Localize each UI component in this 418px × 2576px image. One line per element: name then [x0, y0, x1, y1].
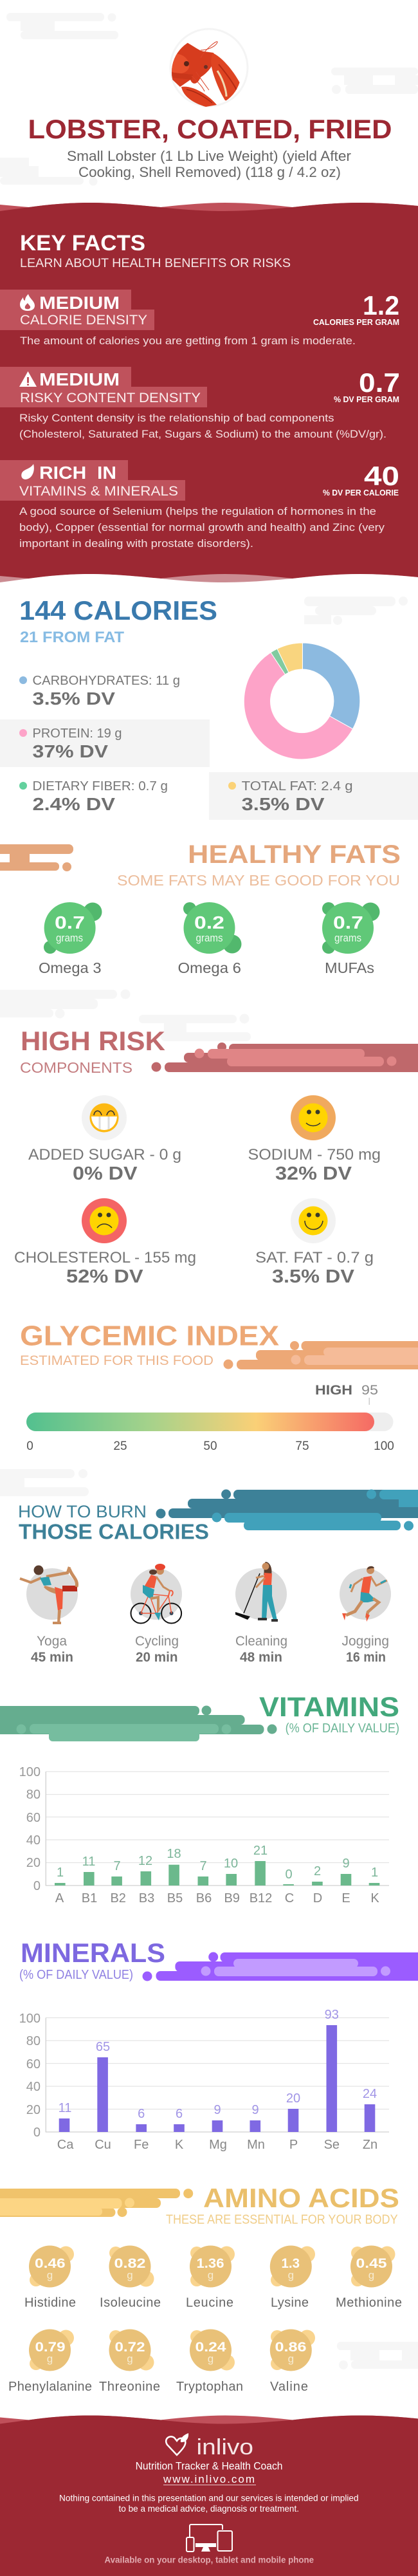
healthy fats heading: HEALTHY FATS: [188, 840, 401, 869]
legend: dietary fiber: 2.4% DV: [32, 794, 115, 814]
bar chart: minerals: 100: [19, 2012, 41, 2026]
logo: [166, 2433, 253, 2460]
fat: omega 6: [177, 902, 242, 976]
bar chart: minerals: 40: [26, 2080, 41, 2094]
vitamins and minerals block: A good source of Selenium (helps the regulation of hormones in the: [19, 506, 376, 517]
vitamins and minerals block: 40: [364, 461, 399, 491]
title: LOBSTER, COATED, FRIED: [28, 114, 392, 144]
bar chart: minerals: 9: [214, 2103, 221, 2117]
activity labels: Cycling: [135, 1634, 179, 1649]
panel: healthy fats: [0, 840, 401, 976]
legend: carbohydrates: 3.5% DV: [32, 689, 115, 709]
glycemic value: 95: [361, 1383, 378, 1398]
logo: inlivo: [197, 2435, 253, 2460]
amino: threonine: [99, 2330, 160, 2394]
calorie density block: The amount of calories you are getting from 1 gram is moderate.: [20, 335, 356, 347]
bar chart: minerals: P: [289, 2138, 298, 2152]
high risk subheading: COMPONENTS: [20, 1059, 132, 1076]
bar chart: vitamins: 18: [167, 1847, 181, 1861]
risky content density block: Risky Content density is the relationship of bad components: [19, 412, 334, 424]
amino: isoleucine: g: [127, 2269, 133, 2281]
ribbon decoration: [0, 844, 73, 871]
healthy fats subheading: SOME FATS MAY BE GOOD FOR YOU: [117, 872, 400, 889]
icon: flame: [20, 294, 35, 311]
amino: histidine: 0.46: [35, 2256, 66, 2271]
amino: threonine: g: [127, 2353, 133, 2365]
legend: total fat: [209, 772, 418, 820]
activity labels: [31, 1634, 389, 1665]
bar chart: minerals: 20: [286, 2091, 300, 2106]
bar chart: vitamins: B5: [167, 1891, 183, 1905]
glycemic value: [315, 1383, 378, 1405]
calorie density block: MEDIUM: [39, 293, 120, 313]
fat: omega 6: Omega 6: [177, 959, 241, 976]
bar chart: minerals: Fe: [134, 2138, 149, 2152]
amino: methionine: [336, 2246, 402, 2310]
glycemic heading: GLYCEMIC INDEX: [20, 1320, 279, 1351]
bar chart: minerals: [19, 2008, 389, 2152]
ribbon decoration: [152, 1042, 418, 1072]
risk: cholesterol: 52% DV: [66, 1266, 143, 1287]
risk: cholesterol: CHOLESTEROL - 155 mg: [14, 1249, 196, 1266]
panel: high risk: [0, 990, 418, 1287]
gauge scale labels: [26, 1440, 394, 1453]
disclaimer: to be a medical advice, diagnosis or treatment.: [118, 2503, 299, 2514]
vitamins and minerals block: body), Copper (essential for normal growth and health) and Zinc (very: [19, 522, 385, 533]
background cloud: [337, 2342, 418, 2369]
fat: omega 3: Omega 3: [39, 959, 102, 976]
bar chart: vitamins: 10: [224, 1857, 238, 1871]
footer: [0, 2416, 418, 2576]
activity labels: 20 min: [136, 1650, 177, 1665]
bar chart: minerals: 80: [26, 2034, 41, 2048]
fat: omega 3: grams: [56, 932, 83, 944]
vitamins and minerals block: % DV PER CALORIE: [323, 488, 399, 497]
bar chart: vitamins: B3: [139, 1891, 154, 1905]
vitamins heading: VITAMINS: [259, 1692, 399, 1723]
bar chart: vitamins: 7: [113, 1859, 121, 1873]
subtitle: [67, 148, 351, 180]
bar chart: minerals: Ca: [57, 2138, 74, 2152]
amino: methionine: g: [368, 2269, 374, 2281]
activity labels: 48 min: [240, 1650, 282, 1665]
bar chart: vitamins: B9: [224, 1891, 240, 1905]
amino: tryptophan: [176, 2330, 243, 2394]
panel: amino acids: [0, 2183, 418, 2394]
amino: histidine: Histidine: [24, 2296, 76, 2310]
bar chart: vitamins: 9: [342, 1857, 350, 1871]
bar chart: minerals: 93: [325, 2008, 339, 2022]
icon: devices: [186, 2525, 232, 2552]
fat: omega 3: [39, 902, 102, 976]
fat: mufas: 0.7: [333, 913, 363, 932]
bar chart: minerals: 6: [138, 2107, 145, 2121]
activity labels: Cleaning: [235, 1634, 287, 1649]
risky content density block: 0.7: [359, 367, 400, 398]
bar chart: vitamins: 0: [285, 1867, 293, 1882]
high risk heading: HIGH RISK: [21, 1026, 165, 1056]
fat: omega 6: 0.2: [194, 913, 224, 932]
bar chart: vitamins: A: [55, 1891, 64, 1905]
icon: leaf: [21, 464, 34, 479]
activity labels: Jogging: [342, 1634, 389, 1649]
risk: added sugar: 0% DV: [73, 1163, 138, 1184]
legend: dietary fiber: [19, 779, 168, 814]
bar chart: vitamins: 40: [26, 1833, 41, 1848]
legend: carbohydrates: CARBOHYDRATES: 11 g: [32, 674, 180, 688]
header background clouds: [0, 13, 418, 185]
amino: phenylalanine: 0.79: [35, 2340, 66, 2355]
amino: isoleucine: Isoleucine: [100, 2296, 161, 2310]
bar chart: vitamins: B1: [82, 1891, 97, 1905]
panel: vitamins: [0, 1692, 399, 1905]
amino: tryptophan: Tryptophan: [176, 2380, 243, 2394]
ribbon decoration: [224, 1341, 418, 1369]
activity: cleaning: [235, 1562, 287, 1622]
risk: saturated fat: 3.5% DV: [272, 1266, 355, 1287]
glycemic subheading: ESTIMATED FOR THIS FOOD: [20, 1353, 214, 1368]
amino: leucine: Leucine: [186, 2296, 233, 2310]
legend: protein: 37% DV: [32, 741, 108, 761]
amino acids heading: AMINO ACIDS: [203, 2183, 399, 2213]
amino: isoleucine: [100, 2246, 161, 2310]
amino: threonine: 0.72: [114, 2340, 145, 2355]
panel: glycemic index: [20, 1320, 418, 1453]
amino: leucine: [186, 2246, 235, 2310]
glycemic gauge: [26, 1413, 394, 1431]
risk: cholesterol: [14, 1198, 196, 1287]
activity labels: Yoga: [37, 1634, 67, 1649]
vitamins and minerals block: [0, 460, 399, 550]
calorie density block: 1.2: [363, 290, 399, 320]
risk: sodium: 32% DV: [275, 1163, 352, 1184]
gauge scale labels: 0: [26, 1440, 33, 1453]
fat: omega 3: 0.7: [55, 913, 85, 932]
legend: total fat: TOTAL FAT: 2.4 g: [242, 779, 353, 793]
fat: mufas: [322, 902, 379, 976]
fat: mufas: MUFAs: [325, 959, 374, 976]
bar chart: vitamins: 1: [371, 1866, 378, 1880]
bar chart: vitamins: E: [341, 1891, 350, 1905]
vitamins and minerals block: important in dealing with prostate disorders).: [19, 538, 253, 550]
risky content density block: (Cholesterol, Saturated Fat, Sugars & Sodium) to the amount (%DV/gr).: [19, 429, 386, 440]
risk: added sugar: [28, 1095, 181, 1184]
bar chart: vitamins: 1: [57, 1866, 64, 1880]
activity: yoga: [20, 1565, 78, 1624]
amino acids subheading: THESE ARE ESSENTIAL FOR YOUR BODY: [166, 2212, 398, 2227]
amino: lysine: 1.3: [282, 2256, 300, 2271]
bar chart: vitamins: 80: [26, 1788, 41, 1802]
panel: key facts: [0, 203, 418, 593]
bar chart: minerals: Mg: [209, 2138, 227, 2152]
icon: warning: [19, 371, 37, 387]
panel: minerals: [19, 1938, 418, 2152]
bar chart: vitamins: 0: [33, 1879, 41, 1893]
bar chart: vitamins: C: [285, 1891, 294, 1905]
donut chart: [244, 643, 360, 759]
risky content density block: [0, 367, 400, 440]
bar chart: vitamins: 21: [253, 1844, 268, 1858]
amino: methionine: 0.45: [356, 2256, 387, 2271]
burn heading: HOW TO BURN: [18, 1502, 147, 1521]
risk: saturated fat: [255, 1198, 374, 1287]
amino: leucine: 1.36: [197, 2256, 224, 2271]
bar chart: vitamins: 11: [82, 1855, 95, 1869]
bar chart: minerals: K: [175, 2138, 184, 2152]
bar chart: vitamins: 7: [199, 1859, 207, 1873]
bar chart: vitamins: 100: [19, 1765, 41, 1779]
amino: isoleucine: 0.82: [114, 2256, 145, 2271]
legend: protein: [0, 719, 210, 767]
bar chart: vitamins: K: [370, 1891, 379, 1905]
bar chart: minerals: 6: [176, 2107, 183, 2121]
amino: methionine: Methionine: [336, 2296, 402, 2310]
bar chart: minerals: Zn: [363, 2138, 377, 2152]
bar chart: vitamins: D: [313, 1891, 322, 1905]
amino: phenylalanine: [8, 2330, 92, 2394]
amino: valine: [270, 2330, 315, 2394]
fat: mufas: grams: [334, 932, 361, 944]
glycemic value: HIGH: [315, 1383, 352, 1398]
minerals subheading: (% OF DAILY VALUE): [19, 1968, 133, 1982]
bar chart: minerals: Mn: [247, 2138, 265, 2152]
website link: www.inlivo.com: [163, 2473, 255, 2485]
from fat subheading: 21 FROM FAT: [20, 629, 124, 646]
amino: valine: g: [288, 2353, 294, 2365]
ribbon decoration: [0, 2189, 193, 2217]
gauge scale labels: 25: [113, 1440, 127, 1453]
legend: carbohydrates: [19, 674, 180, 709]
calorie density block: CALORIE DENSITY: [20, 313, 147, 328]
activity labels: 45 min: [31, 1650, 73, 1665]
subtitle: Small Lobster (1 Lb Live Weight) (yield After: [67, 148, 351, 164]
amino: histidine: [24, 2246, 76, 2310]
bar chart: minerals: 11: [59, 2101, 71, 2115]
activity: jogging: [340, 1566, 391, 1622]
disclaimer: Nothing contained in this presentation and our services is intended or implied: [59, 2493, 359, 2503]
bar chart: vitamins: 20: [26, 1856, 41, 1870]
lobster image: [168, 29, 248, 107]
ribbon decoration: [0, 1705, 277, 1741]
legend: protein: PROTEIN: 19 g: [32, 727, 122, 741]
fat: omega 6: grams: [195, 932, 223, 944]
key facts subheading: LEARN ABOUT HEALTH BENEFITS OR RISKS: [20, 257, 291, 270]
ribbon decoration: [156, 1489, 418, 1530]
panel: how to burn calories: [0, 1469, 418, 1665]
risky content density block: RISKY CONTENT DENSITY: [20, 391, 201, 405]
amino: phenylalanine: g: [47, 2353, 53, 2365]
tagline: Nutrition Tracker & Health Coach: [136, 2460, 283, 2472]
calorie density block: CALORIES PER GRAM: [313, 317, 399, 327]
amino: leucine: g: [208, 2269, 214, 2281]
calories heading: 144 CALORIES: [19, 595, 217, 625]
availability note: Available on your desktop, tablet and mobile phone: [104, 2555, 314, 2565]
amino: lysine: [270, 2246, 315, 2310]
amino: phenylalanine: Phenylalanine: [8, 2380, 92, 2394]
bar chart: minerals: 20: [26, 2103, 41, 2117]
amino: lysine: Lysine: [271, 2296, 309, 2310]
risky content density block: % DV PER GRAM: [334, 394, 399, 404]
amino: valine: 0.86: [275, 2340, 306, 2355]
bar chart: vitamins: 60: [26, 1811, 41, 1825]
ribbon decoration: [143, 1952, 418, 1981]
amino: lysine: g: [288, 2269, 294, 2281]
vitamins and minerals block: RICH IN: [39, 463, 116, 483]
bar chart: minerals: 24: [363, 2087, 377, 2101]
risk: added sugar: ADDED SUGAR - 0 g: [28, 1146, 181, 1163]
bar chart: minerals: Se: [324, 2138, 340, 2152]
gauge scale labels: 75: [295, 1440, 309, 1453]
amino: tryptophan: g: [208, 2353, 214, 2365]
calorie density block: [0, 290, 399, 347]
activity: cycling: [131, 1564, 182, 1623]
key facts heading: KEY FACTS: [20, 231, 145, 255]
subtitle: Cooking, Shell Removed) (118 g / 4.2 oz): [78, 164, 341, 180]
bar chart: vitamins: B2: [110, 1891, 126, 1905]
bar chart: minerals: 9: [251, 2103, 259, 2117]
risky content density block: MEDIUM: [39, 369, 120, 389]
risk: sodium: [248, 1095, 381, 1184]
amino: tryptophan: 0.24: [195, 2340, 226, 2355]
legend: total fat: 3.5% DV: [242, 794, 325, 814]
risk: sodium: SODIUM - 750 mg: [248, 1146, 381, 1163]
amino: valine: Valine: [270, 2380, 308, 2394]
gauge scale labels: 50: [203, 1440, 217, 1453]
bar chart: minerals: 65: [96, 2040, 110, 2054]
burn heading: [18, 1502, 209, 1543]
risk: saturated fat: SAT. FAT - 0.7 g: [255, 1249, 374, 1266]
minerals heading: MINERALS: [21, 1938, 165, 1968]
bar chart: minerals: 60: [26, 2057, 41, 2071]
bar chart: vitamins: 2: [314, 1864, 321, 1878]
bar chart: vitamins: B12: [250, 1891, 272, 1905]
bar chart: vitamins: [19, 1765, 389, 1905]
bar chart: minerals: 0: [33, 2126, 41, 2140]
legend: dietary fiber: DIETARY FIBER: 0.7 g: [32, 779, 168, 793]
bar chart: vitamins: B6: [196, 1891, 212, 1905]
disclaimer: [59, 2493, 359, 2514]
vitamins subheading: (% OF DAILY VALUE): [286, 1721, 399, 1736]
amino: threonine: Threonine: [99, 2380, 160, 2394]
activity labels: 16 min: [346, 1650, 386, 1665]
burn heading: THOSE CALORIES: [19, 1520, 209, 1543]
bar chart: minerals: Cu: [95, 2138, 111, 2152]
vitamins and minerals block: VITAMINS & MINERALS: [19, 484, 178, 499]
bar chart: vitamins: 12: [138, 1854, 152, 1868]
gauge scale labels: 100: [374, 1440, 394, 1453]
amino: histidine: g: [47, 2269, 53, 2281]
panel: calories: [0, 595, 418, 820]
